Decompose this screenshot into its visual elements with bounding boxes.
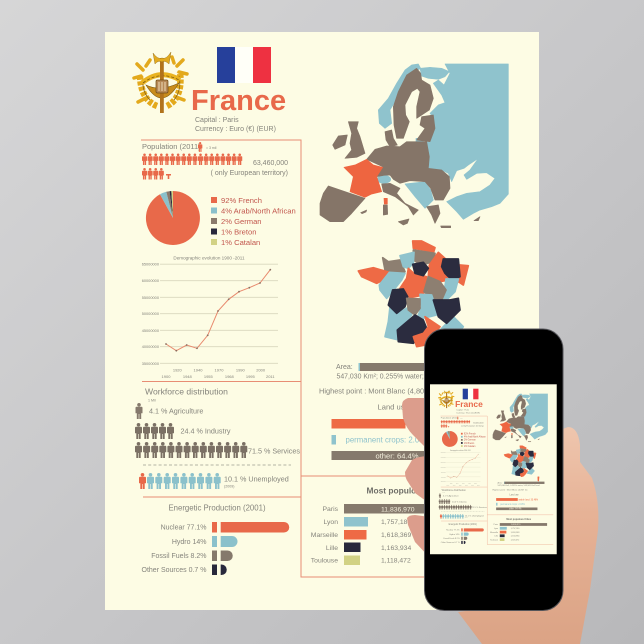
city Toulouse: Toulouse [311,558,338,564]
poster [105,32,539,610]
flag of France [217,47,271,83]
pie chart: ethnic groups [146,191,200,245]
panel: workforce distribution [135,386,300,489]
finger two [405,456,430,504]
unemployment row: 10.1 % Unemployed [224,474,289,484]
pie legend [211,196,296,247]
chart x axis labels: 1955 [204,374,214,379]
energy bar hydro [172,536,238,547]
pie legend: 1% Catalan [221,238,260,247]
chart x axis labels: 2011 [266,374,275,379]
map: Europe [320,64,508,228]
population line [166,270,270,351]
hand holding phone [402,398,598,644]
area bar [358,363,497,371]
panel: area [319,363,497,396]
city Marseille: Marseille [311,532,338,539]
pie legend: 92% French [221,196,262,205]
other land bar [332,451,473,460]
energy bar nuclear: Nuclear 77.1% [161,524,206,532]
panel: energetic production [142,504,289,575]
capital and currency: Currency : Euro (€) (EUR) [195,126,276,133]
population note: ( only European territory) [211,170,288,177]
chart y axis labels: 60000000 [142,278,160,283]
arable land bar: arable land: 33.46% [408,420,476,428]
area label: Area: [336,364,353,371]
chart y axis labels: 55000000 [142,295,160,300]
agriculture row: 4.1 % Agriculture [149,406,203,416]
chart y axis labels [142,262,160,366]
city Marseille [311,530,411,540]
population heading: Population (2011) [142,142,201,151]
area note: 547,030 Km²; 0.255% water; 543,965 Km² land [336,374,480,380]
chart x axis labels: 1900 [162,374,171,379]
city Toulouse: 1,118,472 [381,558,411,564]
panel: most populous cities [311,486,506,565]
workforce heading: Workforce distribution [145,386,228,396]
panel: population [142,142,288,180]
finger three [407,515,430,558]
unemployment row: (2009) [224,484,234,488]
highest point: Highest point : Mont Blanc (4,807 m) [319,386,439,396]
panel: land use [332,402,476,460]
panel: workforce distribution: 1 Mil [148,398,156,402]
pie legend: 1% Breton [221,228,256,236]
city Paris [322,504,506,514]
cities heading: Most populous Cities [366,486,452,496]
industry row [135,423,231,439]
city Lille: Lille [326,545,338,552]
unemployment row [139,473,289,489]
panel frames [141,140,527,577]
industry row: 24.4 % Industry [180,426,231,436]
energy bar hydro: Hydro 14% [172,539,206,546]
chart x axis labels: 1968 [225,374,235,379]
chart x axis labels: 2000 [256,368,266,372]
chart y axis labels: 35000000 [142,361,160,366]
map: French regions [358,241,479,361]
services row [135,442,300,458]
city Lille: 1,163,934 [381,545,411,552]
land use heading: Land use [378,402,409,412]
energy bar other sources [142,564,227,575]
energy bar fossil fuels: Fossil Fuels 8.2% [151,553,206,560]
chart y axis labels: 65000000 [142,262,160,267]
chart x axis labels: 1920 [173,368,183,372]
line chart: demographic evolution [142,256,278,379]
palm and thumb [458,427,598,644]
capital and currency [195,117,276,133]
finger one [402,398,430,452]
chart y axis labels: 45000000 [142,328,160,333]
title: France [191,85,286,117]
population person icons [142,154,242,180]
other land bar: other: 64.4% [375,451,419,460]
arable land bar [332,419,476,428]
capital and currency: Capital : Paris [195,117,239,124]
city Toulouse [311,556,411,565]
chart x axis labels: 1940 [194,368,203,372]
city Paris: Paris [322,506,339,513]
city Paris: 11,836,970 [381,506,415,513]
energy heading: Energetic Production (2001) [168,504,266,512]
chart x axis labels: 1948 [183,374,193,379]
pie legend: 2% German [221,217,262,226]
city Marseille: 1,618,369 [381,532,411,539]
city Lyon [324,517,411,526]
population number: 63,460,000 [253,160,288,167]
chart x axis labels [162,368,275,379]
chart x axis labels: 1990 [236,368,246,372]
services row: 71.5 % Services [248,446,300,456]
population heading: = 3 mil [206,146,217,150]
permanent crops bar: permanent crops: 2.03% [346,436,431,444]
agriculture row [136,403,203,419]
city Lyon: Lyon [324,519,338,526]
icon: coat of arms [134,52,187,113]
pie legend: 4% Arab/North African [221,206,296,216]
chart x axis labels: 1995 [246,374,256,379]
phone [424,329,563,610]
chart y axis labels: 50000000 [142,311,160,316]
city Lyon: 1,757,180 [381,519,411,526]
energy bar fossil fuels [151,550,233,561]
energy bar other sources: Other Sources 0.7 % [142,567,206,574]
chart title: Demographic evolution 1900 -2011 [173,256,245,260]
chart x axis labels: 1970 [215,368,224,372]
chart y axis labels: 40000000 [142,344,160,349]
energy bar nuclear [161,522,289,532]
city Lille [326,542,411,552]
phone screen showing the poster [430,384,557,554]
